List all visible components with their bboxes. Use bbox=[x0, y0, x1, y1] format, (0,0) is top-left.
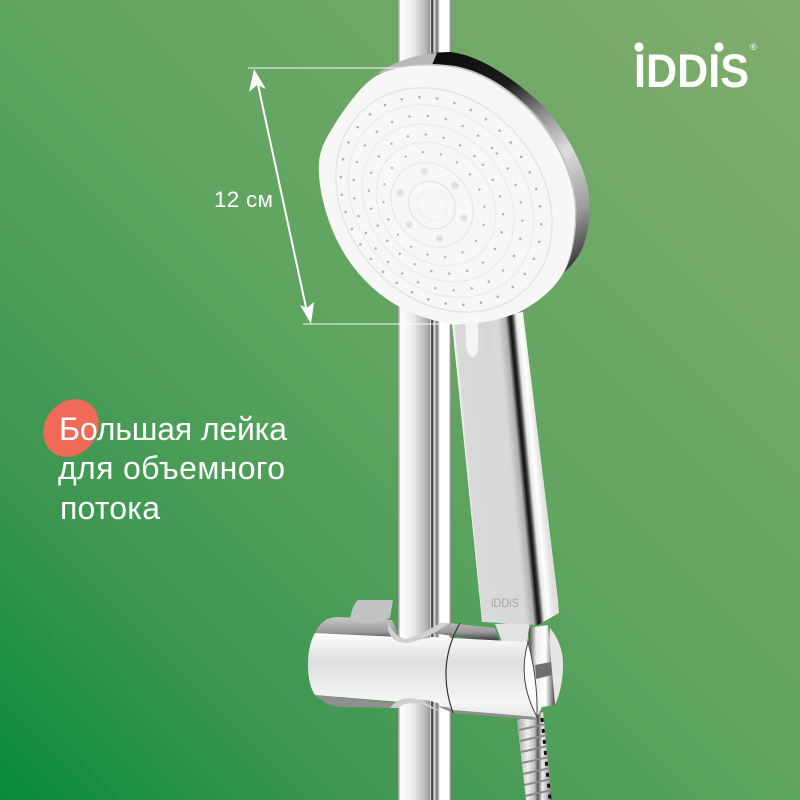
clip upper left shell bbox=[315, 617, 398, 637]
clip body bbox=[308, 600, 537, 720]
headline text: для объемного bbox=[58, 450, 285, 486]
rail collar band bbox=[388, 622, 450, 643]
white hook under head bbox=[465, 316, 494, 357]
clip release button bbox=[350, 600, 393, 623]
dimension arrow bbox=[249, 69, 314, 324]
clip rear mount bbox=[528, 625, 563, 717]
brand logo: ® bbox=[750, 42, 757, 52]
rail lower collar bbox=[390, 698, 442, 712]
handle neck bbox=[495, 622, 530, 644]
brand logo: IDDIS bbox=[634, 44, 749, 97]
headline text bbox=[58, 411, 287, 526]
dimension lines bbox=[248, 68, 460, 324]
chrome back of head bbox=[378, 52, 590, 273]
coral accent blob bbox=[32, 388, 110, 468]
clip upper right shell bbox=[432, 623, 500, 643]
handle logo: iDDiS bbox=[491, 596, 519, 610]
metal hose bbox=[517, 712, 552, 800]
clip front bbox=[308, 633, 537, 717]
clip lower skirt bbox=[315, 695, 537, 720]
headline text: Большая лейка bbox=[59, 411, 287, 447]
dimension label: 12 см bbox=[214, 187, 273, 212]
headline text: потока bbox=[60, 490, 160, 526]
clip end cap bbox=[524, 642, 537, 717]
shower rail bbox=[398, 0, 451, 800]
shower handle bbox=[452, 312, 559, 625]
spray plate rings and nozzles bbox=[291, 44, 597, 356]
shower head face bbox=[291, 44, 597, 356]
